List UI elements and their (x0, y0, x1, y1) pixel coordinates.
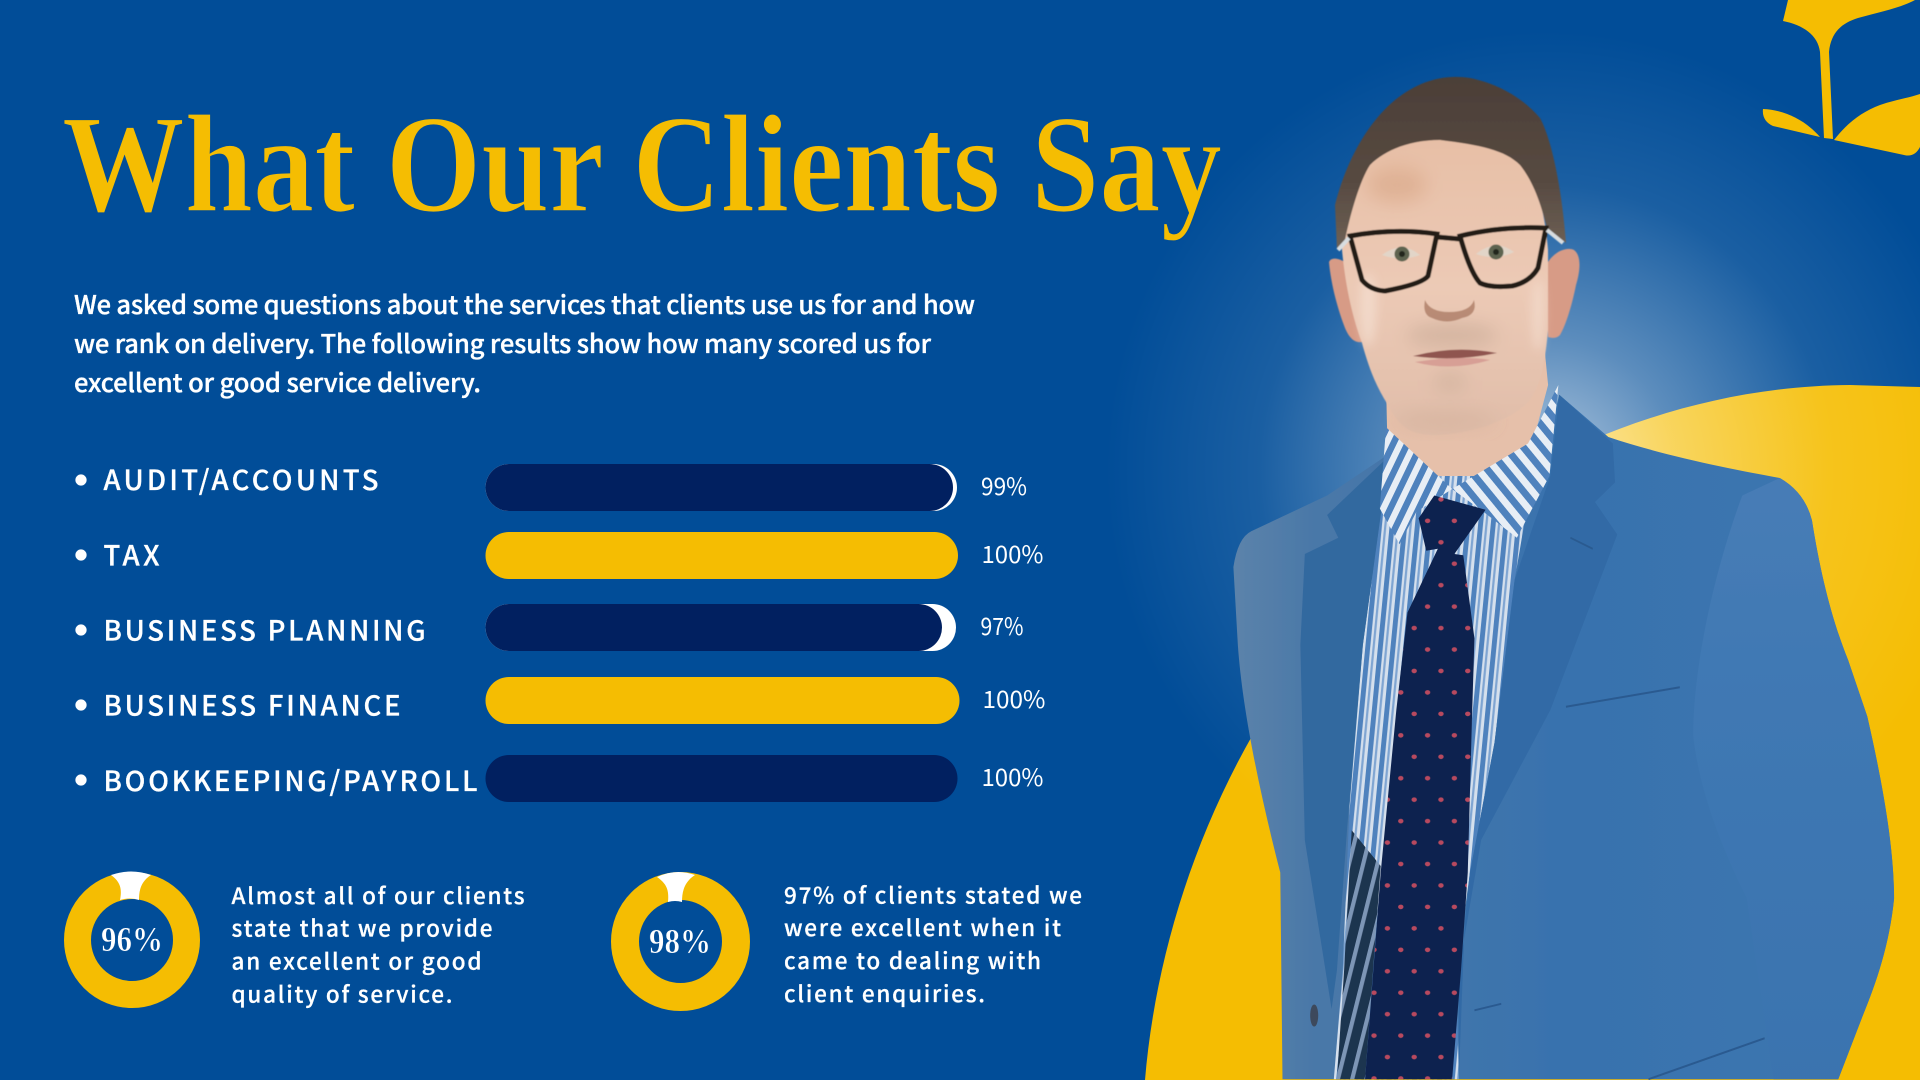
intro paragraph: We asked some questions about the services that clients use us for and how (74, 285, 975, 322)
tie (1365, 496, 1486, 1079)
glow behind portrait (1100, 30, 1920, 910)
donut chart 98% (625, 872, 736, 997)
bar values: 99% (981, 467, 1027, 502)
bar values: 100% (982, 680, 1046, 715)
service labels: BOOKKEEPING/PAYROLL (104, 759, 478, 799)
jacket seams and pocket (1474, 538, 1765, 1079)
shirt (1334, 476, 1532, 1079)
eyes (1382, 244, 1514, 262)
jacket button (1310, 1004, 1318, 1027)
intro paragraph (74, 285, 975, 400)
caption 96%: quality of service. (232, 978, 452, 1010)
caption 98%: 97% of clients stated we (784, 878, 1082, 910)
glasses temples (1338, 230, 1563, 250)
ears (1329, 249, 1580, 342)
jacket sleeve shading (1693, 478, 1894, 1079)
intro paragraph: we rank on delivery. The following results show how many scored us for (74, 324, 932, 361)
caption 98%: client enquiries. (784, 977, 985, 1009)
right lapel (1459, 395, 1617, 1079)
nose (1424, 300, 1475, 322)
bar: business planning 97% (486, 604, 956, 651)
service labels: AUDIT/ACCOUNTS (104, 458, 378, 498)
left lapel (1300, 460, 1385, 1009)
portrait head (1329, 77, 1580, 435)
shirt lower shadow (1337, 830, 1381, 1079)
service labels: BUSINESS PLANNING (104, 608, 426, 648)
jacket (1233, 395, 1894, 1079)
neck (1386, 340, 1548, 492)
bar: audit 99% (486, 464, 957, 511)
bar values (980, 467, 1046, 793)
donut chart 96%: 96% (101, 920, 163, 959)
title: What Our Clients Say (62, 87, 1222, 242)
service labels: TAX (104, 534, 160, 574)
bar chart (486, 464, 960, 802)
bar: bookkeeping 100% (486, 755, 958, 802)
caption 96%: an excellent or good (232, 944, 482, 976)
caption 96%: state that we provide (232, 912, 492, 944)
yellow arch shape (1145, 385, 1920, 1080)
face shading (1360, 167, 1544, 428)
caption 98%: came to dealing with (784, 944, 1041, 976)
service labels (76, 458, 478, 799)
right collar (1452, 385, 1558, 538)
bar values: 100% (982, 758, 1044, 793)
bar values: 100% (982, 535, 1044, 570)
mouth (1413, 350, 1497, 367)
left collar (1380, 427, 1452, 544)
intro paragraph: excellent or good service delivery. (74, 363, 481, 400)
caption 96% (232, 879, 524, 1010)
bar: tax 100% (486, 532, 958, 579)
donut chart 96% (78, 872, 186, 994)
bar values: 97% (980, 607, 1024, 642)
donut chart 98%: 98% (649, 922, 711, 961)
glasses (1350, 228, 1546, 291)
caption 98% (784, 878, 1082, 1009)
service labels: BUSINESS FINANCE (104, 684, 400, 724)
hair (1335, 77, 1566, 250)
bar: business finance 100% (486, 677, 960, 724)
face (1342, 139, 1548, 435)
caption 98%: were excellent when it (784, 911, 1061, 943)
portrait body: man in blue suit (1233, 340, 1894, 1079)
logo plant shape (1763, 0, 1920, 156)
caption 96%: Almost all of our clients (232, 879, 524, 911)
